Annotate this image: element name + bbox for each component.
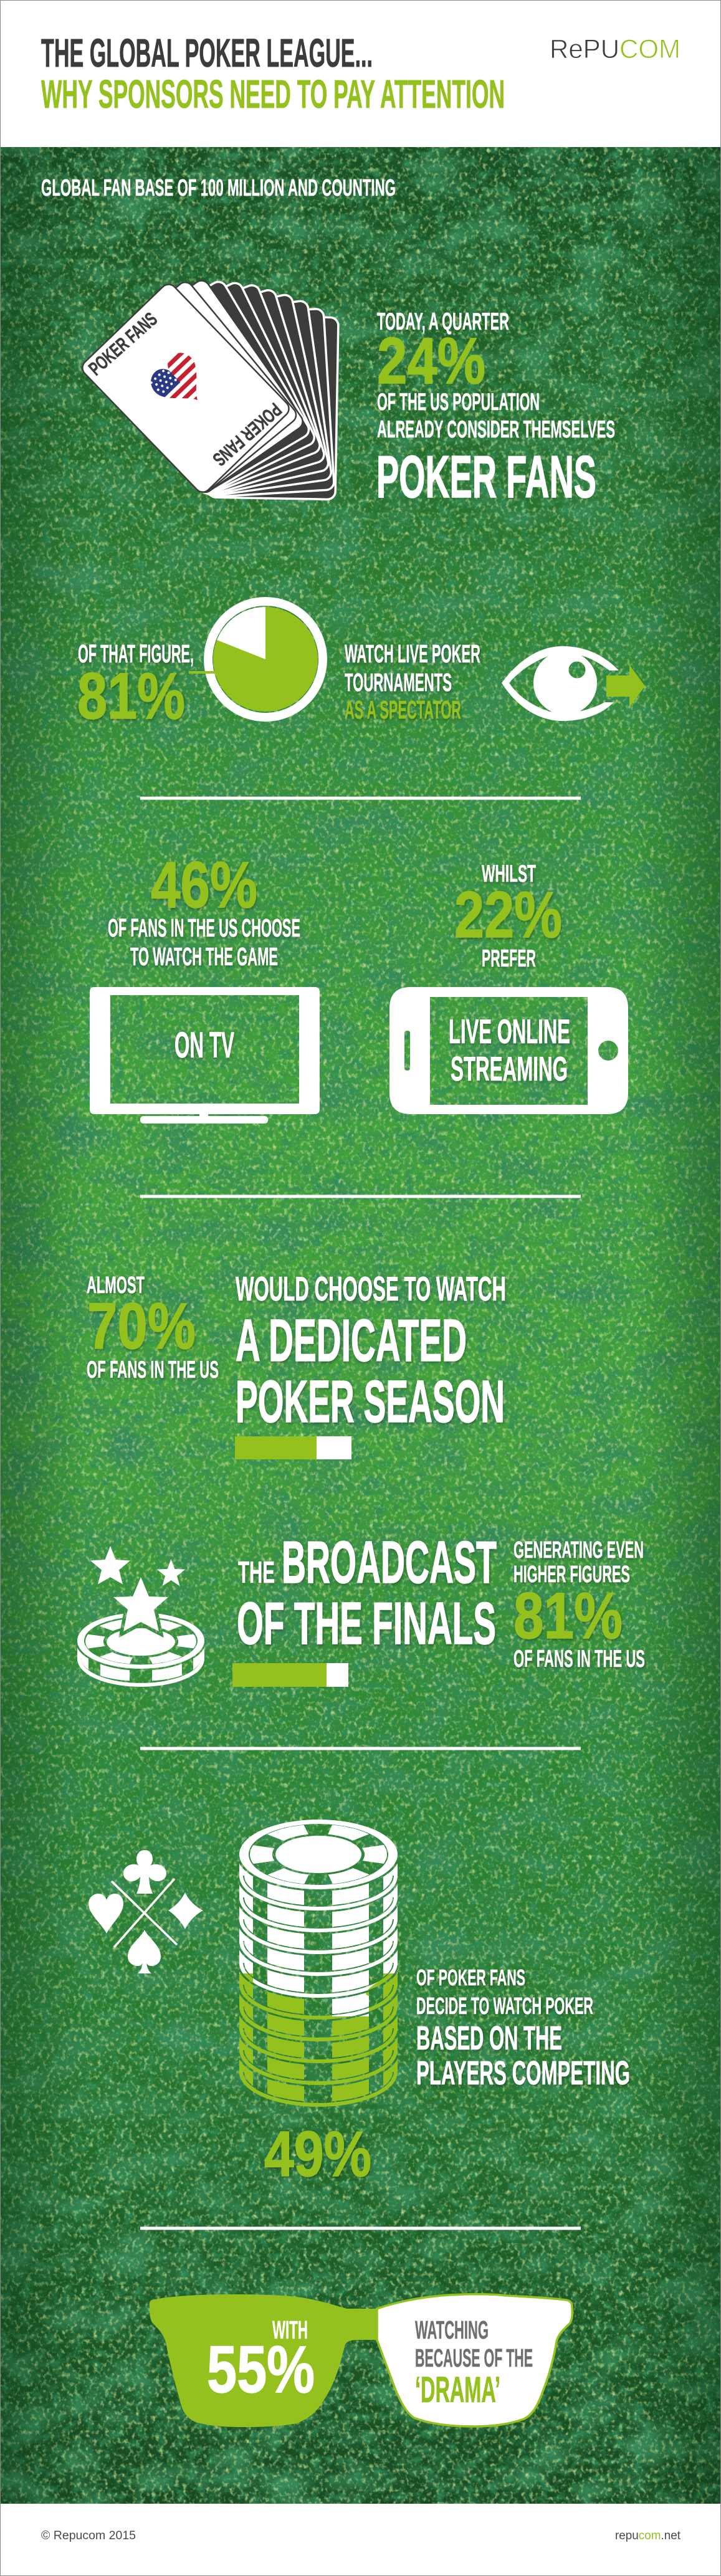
card label: top: POKER FANS	[84, 308, 161, 379]
section: glasses 55% drama	[150, 2294, 572, 2427]
headline: OF THE FINALS	[237, 1590, 496, 1657]
section: 22% online streaming	[389, 861, 628, 1114]
section: 81% spectators	[77, 601, 645, 733]
text: HIGHER FIGURES	[513, 1562, 630, 1588]
label: STREAMING	[451, 1049, 568, 1088]
highlight: ‘DRAMA’	[415, 2370, 500, 2410]
section: 70% dedicated season	[87, 1269, 506, 1459]
stat: 81%: 81%	[513, 1580, 623, 1653]
text block: 24% poker fans	[376, 308, 615, 510]
label: LIVE ONLINE	[449, 1012, 570, 1051]
line: OF THE US POPULATION	[377, 389, 540, 416]
stat: 81%: 81%	[77, 660, 185, 733]
text: TO WATCH THE GAME	[130, 942, 278, 971]
copyright: © Repucom 2015	[41, 2529, 136, 2542]
text: WATCHING	[415, 2316, 489, 2344]
headline: A DEDICATED	[236, 1307, 467, 1374]
headline: BROADCAST	[282, 1529, 497, 1596]
text: WATCH LIVE POKER	[345, 639, 480, 668]
icon: US flag heart	[151, 353, 198, 400]
stat: 46%: 46%	[151, 849, 257, 922]
progress bar: 70%	[235, 1436, 351, 1459]
text: OF FANS IN THE US CHOOSE	[108, 914, 300, 942]
lead-in: TODAY, A QUARTER	[377, 308, 509, 335]
icon: eye	[502, 646, 619, 721]
divider	[140, 1195, 581, 1198]
pie chart: 81%	[189, 601, 323, 717]
right lens	[377, 2294, 572, 2426]
text: AS A SPECTATOR	[345, 695, 461, 724]
text: TOURNAMENTS	[345, 668, 452, 697]
text: WITH	[272, 2316, 308, 2344]
divider	[140, 2227, 581, 2230]
icon: stars and poker chip	[77, 1546, 204, 1687]
stat: 70%: 70%	[87, 1290, 196, 1363]
section: broadcast of the finals	[77, 1540, 646, 1687]
left lens	[150, 2294, 377, 2427]
text: PREFER	[482, 945, 536, 972]
stat: 49%: 49%	[264, 2118, 371, 2190]
icon: smartphone	[389, 987, 628, 1114]
lead-in: OF THAT FIGURE,	[78, 639, 194, 668]
headline: POKER SEASON	[236, 1368, 505, 1435]
logo: Repucom: RePUCOM	[550, 34, 680, 64]
card label: bottom: POKER FANS	[209, 399, 286, 470]
text: WHILST	[482, 861, 536, 887]
icon: television	[90, 987, 320, 1123]
text: BASED ON THE	[416, 2020, 562, 2057]
footer panel	[0, 2504, 721, 2576]
text: ALMOST	[87, 1272, 145, 1299]
divider	[140, 1747, 581, 1750]
text: WOULD CHOOSE TO WATCH	[236, 1269, 506, 1308]
icon: card suits crossed	[88, 1850, 203, 1973]
section: 49% players	[88, 1813, 630, 2190]
label: ON TV	[174, 1025, 234, 1066]
header panel	[0, 0, 721, 147]
text: BECAUSE OF THE	[415, 2344, 533, 2372]
stat: 55%: 55%	[207, 2332, 315, 2407]
text: THE	[238, 1556, 275, 1590]
text: DECIDE TO WATCH POKER	[416, 1993, 593, 2020]
stat: 24%: 24%	[377, 325, 485, 398]
website: repucom.net	[615, 2529, 681, 2542]
arrow	[606, 665, 645, 707]
text: OF POKER FANS	[416, 1965, 525, 1990]
section: 46% on TV	[90, 849, 320, 1123]
title: THE GLOBAL POKER LEAGUE...	[41, 31, 373, 75]
icon: fan of poker cards	[79, 277, 338, 500]
progress bar: 81%	[232, 1663, 348, 1687]
intro line: GLOBAL FAN BASE OF 100 MILLION AND COUNTING	[41, 175, 396, 201]
text: OF FANS IN THE US	[87, 1357, 219, 1383]
icon: stack of poker chips	[239, 1820, 398, 2107]
stat: 22%: 22%	[454, 879, 562, 952]
divider	[140, 796, 581, 800]
